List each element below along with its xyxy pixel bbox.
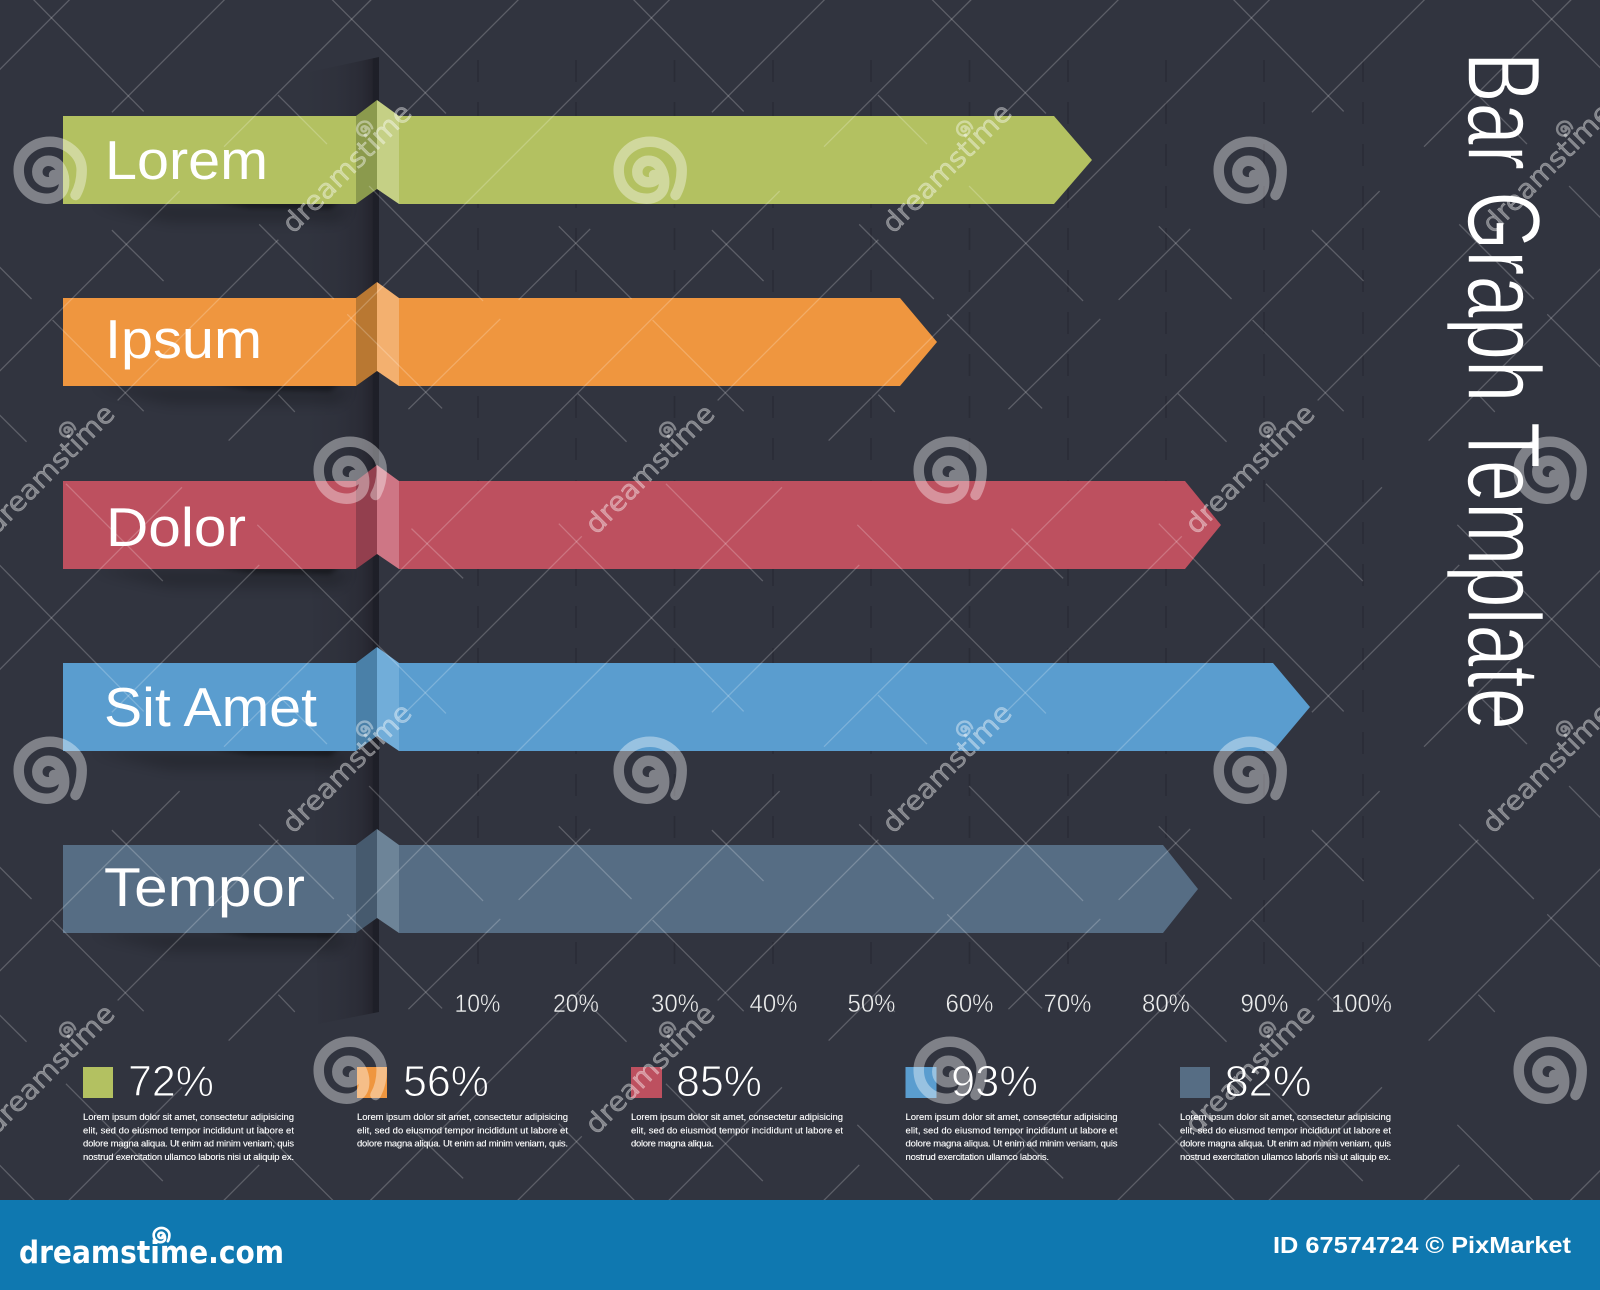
bar: Lorem 72%: Lorem [105,129,268,191]
legend item: 56%: elit, sed do eiusmod tempor incididunt ut labore et [357,1125,568,1136]
legend item: 85%: Lorem ipsum dolor sit amet, consectetur adipisicing [631,1112,843,1123]
bar: Dolor 85% [63,465,1221,569]
axis labels: 100% [1331,990,1392,1018]
legend item: 85%: dolore magna aliqua. [631,1139,714,1150]
legend item: 56%: Lorem ipsum dolor sit amet, consectetur adipisicing [357,1112,568,1123]
bar: Tempor 82%: Tempor [104,856,305,918]
legend item: 56%: dolore magna aliqua. Ut enim ad minim veniam, quis. [357,1139,568,1150]
fold spine shadow [305,57,379,1024]
bar: Ipsum 56%: Ipsum [105,308,262,370]
legend item: 93% [906,1057,1118,1163]
axis labels: 90% [1240,990,1288,1018]
bar: Tempor 82% [63,829,1198,933]
legend item: 72%: 72% [128,1057,214,1106]
image credit: ID 67574724 © PixMarket [1273,1232,1571,1258]
watermark wordmarks: dreamstime [1179,398,1321,540]
legend item: 72%: elit, sed do eiusmod tempor incididunt ut labore et [83,1125,294,1136]
bar: Sit Amet 93%: Sit Amet [104,676,317,738]
watermark wordmarks: dreamstime [276,97,418,239]
watermark wordmarks: dreamstime [579,398,721,540]
legend item: 85%: elit, sed do eiusmod tempor incididunt ut labore et [631,1125,843,1136]
legend item: 93%: 93% [951,1057,1038,1106]
bar: Dolor 85%: Dolor [106,496,246,558]
legend item: 72%: dolore magna aliqua. Ut enim ad minim veniam, quis [83,1139,294,1150]
legend item: 72% [83,1057,294,1163]
axis labels: 30% [651,990,699,1018]
footer band [0,1200,1600,1290]
axis labels: 20% [553,990,599,1018]
chart gridlines [478,60,1363,980]
watermark wordmarks: dreamstime [876,97,1018,239]
legend item: 72%: nostrud exercitation ullamco laboris nisi ut aliquip ex. [83,1152,294,1163]
legend item: 56%: 56% [403,1057,489,1106]
legend item: 93%: Lorem ipsum dolor sit amet, consectetur adipisicing [906,1112,1118,1123]
legend item: 85% [631,1057,843,1150]
legend item: 56% [357,1057,568,1150]
legend item: 72%: Lorem ipsum dolor sit amet, consectetur adipisicing [83,1112,294,1123]
bar chart [63,100,1310,933]
watermark wordmarks: dreamstime [876,697,1018,839]
bar: Ipsum 56% [63,282,937,386]
bar: Lorem 72% [63,100,1092,204]
bar shadows [90,202,350,951]
watermark wordmarks: dreamstime [579,998,721,1140]
legend item: 93%: dolore magna aliqua. Ut enim ad minim veniam, quis [906,1139,1118,1150]
legend item: 82% [1180,1057,1391,1163]
axis labels: 50% [848,990,896,1018]
axis labels: 60% [946,990,994,1018]
title: Bar Graph Template [1445,52,1561,730]
legend item: 82%: Lorem ipsum dolor sit amet, consectetur adipisicing [1180,1112,1391,1123]
legend item: 82%: nostrud exercitation ullamco laboris nisi ut aliquip ex. [1180,1152,1391,1163]
legend item: 93%: elit, sed do eiusmod tempor incididunt ut labore et [906,1125,1118,1136]
legend item: 82%: dolore magna aliqua. Ut enim ad minim veniam, quis [1180,1139,1391,1150]
axis labels [454,990,1392,1018]
legend item: 82%: elit, sed do eiusmod tempor incididunt ut labore et [1180,1125,1391,1136]
axis labels: 10% [454,990,500,1018]
bar: Sit Amet 93% [63,647,1310,751]
legend item: 85%: 85% [676,1057,762,1106]
watermark spirals [19,142,1582,1099]
icon: logo spiral [154,1228,169,1242]
legend [83,1057,1391,1163]
axis labels: 80% [1142,990,1190,1018]
footer logo: dreamstime.com [19,1235,284,1271]
watermark wordmarks: dreamstime [276,697,418,839]
legend item: 82%: 82% [1224,1057,1312,1106]
axis labels: 70% [1044,990,1092,1018]
axis labels: 40% [750,990,798,1018]
watermark wordmarks: dreamstime [1179,998,1321,1140]
legend item: 93%: nostrud exercitation ullamco laboris. [906,1152,1049,1163]
